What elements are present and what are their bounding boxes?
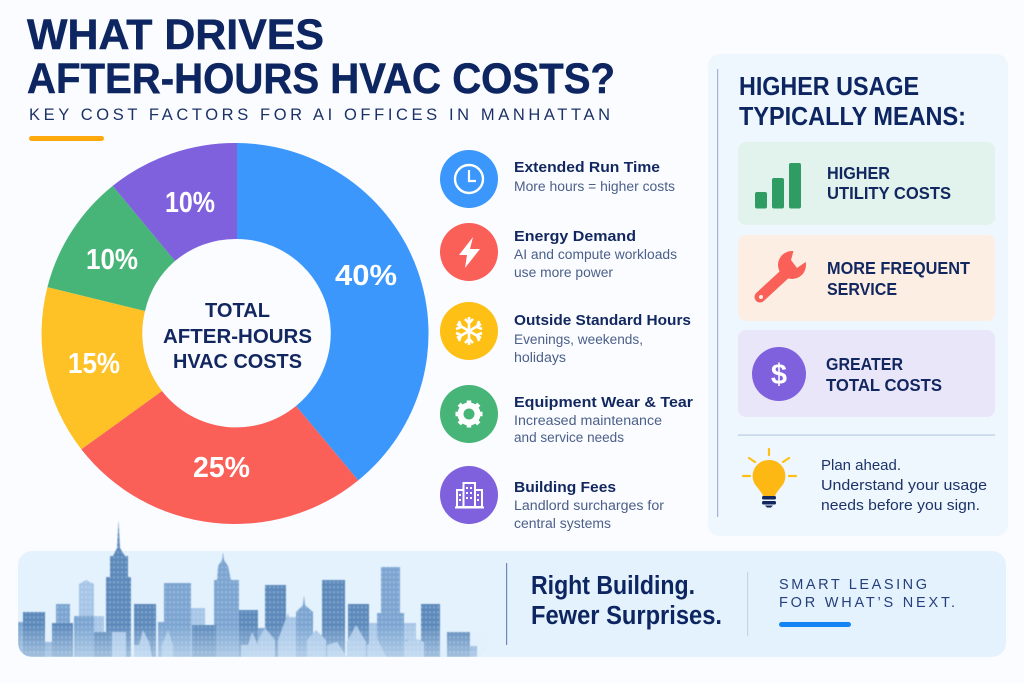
center label: TOTAL [205,299,270,322]
subtitle: KEY COST FACTORS FOR AI OFFICES IN MANHATTAN [29,106,610,124]
factor: energy demand [440,223,677,281]
slice: 10% green [47,186,175,311]
card: higher utility costs [738,142,995,225]
icon: light bulb [743,449,796,508]
percent labels: 10% [86,244,138,276]
tagline: Fewer Surprises. [531,602,722,630]
icon: gear [440,385,498,443]
percent labels: 40% [335,260,397,292]
percent labels: 25% [193,452,250,484]
tip text: Plan ahead. [821,457,901,474]
percent labels: 15% [68,348,120,380]
card: more frequent service: MORE FREQUENT [827,258,970,278]
panel heading: TYPICALLY MEANS: [739,101,966,131]
card: more frequent service: SERVICE [827,279,897,299]
factor: building fees: Building Fees [514,479,616,496]
center label: AFTER-HOURS [163,325,312,348]
tip text: needs before you sign. [821,497,980,514]
title: AFTER-HOURS HVAC COSTS? [27,55,615,103]
secondary tagline [779,577,955,611]
factor: energy demand: Energy Demand [514,228,636,245]
factor: extended run time: More hours = higher costs [514,179,675,194]
percent labels: 10% [165,187,215,219]
card: higher utility costs: UTILITY COSTS [827,183,951,203]
factor: building fees: central systems [514,516,611,531]
percent labels [68,187,397,484]
card: higher utility costs: HIGHER [827,163,890,183]
panel: higher usage [708,54,1008,536]
icon: buildings [440,466,498,524]
factor: outside standard hours: Outside Standard Hours [514,312,691,329]
card: greater total costs: GREATER [826,354,903,374]
icon: dollar [752,347,806,401]
tip text: Understand your usage [821,477,987,494]
center label: HVAC COSTS [173,350,302,373]
donut chart: cost shares [42,143,429,524]
slice: 25% [81,391,358,524]
tagline: Right Building. [531,572,695,600]
factor: energy demand: AI and compute workloads [514,247,677,262]
icon: snowflake [440,302,498,360]
factor: building fees [440,466,665,531]
icon: lightning bolt [440,223,498,281]
secondary tagline: SMART LEASING [779,577,927,593]
icon: bar chart [755,163,801,208]
factor: building fees: Landlord surcharges for [514,498,665,513]
factor: outside standard hours: holidays [514,350,566,365]
factor: extended run time: Extended Run Time [514,159,660,176]
factor: outside standard hours: Evenings, weekends, [514,332,643,347]
bottom banner [18,520,1006,657]
factor: outside standard hours [440,302,691,365]
card: more frequent service [738,235,995,321]
title: WHAT DRIVES [27,11,324,59]
center label [163,299,312,373]
blue accent bar [779,622,851,627]
slice: 15% [42,287,162,449]
panel heading [739,71,966,131]
skyline illustration [18,520,488,657]
icon: dollar: $ [771,359,787,391]
panel heading: HIGHER USAGE [739,71,919,101]
factor: energy demand: use more power [514,265,614,280]
orange accent bar [29,136,104,141]
factor: equipment wear and tear [440,385,693,445]
tagline [531,572,722,630]
card: greater total costs: TOTAL COSTS [826,375,942,395]
title [27,11,615,103]
factor: extended run time [440,150,675,208]
slice: 10% purple [113,143,237,261]
factor: equipment wear and tear: Equipment Wear & Tear [514,394,693,411]
factor: equipment wear and tear: Increased maintenance [514,413,662,428]
card: greater total costs [738,330,995,417]
slice: 40% [237,143,429,480]
icon: wrench [759,249,809,299]
factor: equipment wear and tear: and service needs [514,430,624,445]
icon: clock [440,150,498,208]
tip text [821,457,987,514]
secondary tagline: FOR WHAT’S NEXT. [779,595,955,611]
